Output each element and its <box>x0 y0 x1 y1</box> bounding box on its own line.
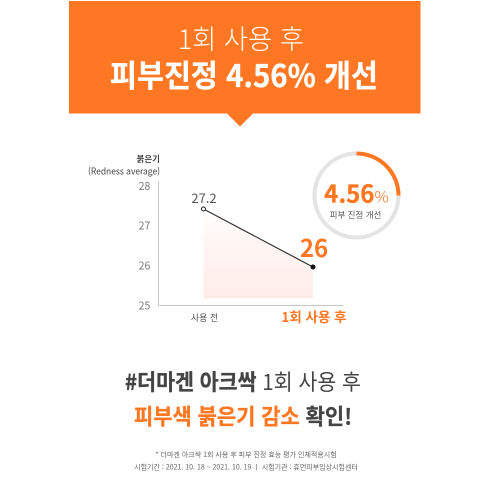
ring track <box>314 154 398 238</box>
area under the line <box>204 209 313 298</box>
y axis title: 붉은기 <box>137 153 160 165</box>
y axis tick labels <box>139 179 150 314</box>
before label: 사용 전 <box>191 311 218 324</box>
after point <box>310 264 316 270</box>
trend line <box>204 209 313 267</box>
ring progress <box>356 154 398 196</box>
y axis subtitle: (Redness average) <box>88 164 160 178</box>
y axis tick labels: 27 <box>139 218 150 234</box>
footnote line 1: * 더마겐 아크싹 1회 사용 후 피부 진정 효능 평가 인체적용시험 <box>155 450 337 460</box>
headline line 2: 피부색 붉은기 감소 확인! <box>134 400 352 432</box>
line chart <box>88 153 347 326</box>
after label: 1회 사용 후 <box>281 306 347 326</box>
y axis tick labels: 25 <box>139 298 150 314</box>
y axis tick labels: 28 <box>139 179 150 194</box>
footnote line 2: 시험기간 : 2021. 10. 18 ~ 2021. 10. 19 ㅣ 시험기관 : 휴먼피부임상시험센터 <box>134 462 358 472</box>
before value: 27.2 <box>191 188 217 207</box>
axes <box>158 181 343 306</box>
before point <box>202 207 206 211</box>
banner title: 피부진정 4.56% 개선 <box>110 51 378 96</box>
ring value: 4.56% <box>324 174 389 210</box>
y axis tick labels: 26 <box>139 258 150 274</box>
footnote <box>134 450 358 472</box>
banner panel <box>69 1 420 126</box>
after value: 26 <box>300 229 328 264</box>
closing headline <box>125 365 361 432</box>
banner subtitle: 1회 사용 후 <box>178 18 304 57</box>
ring callout <box>314 154 398 238</box>
headline line 1: #더마겐 아크싹 1회 사용 후 <box>125 365 361 397</box>
ring caption: 피부 진정 개선 <box>330 209 381 221</box>
